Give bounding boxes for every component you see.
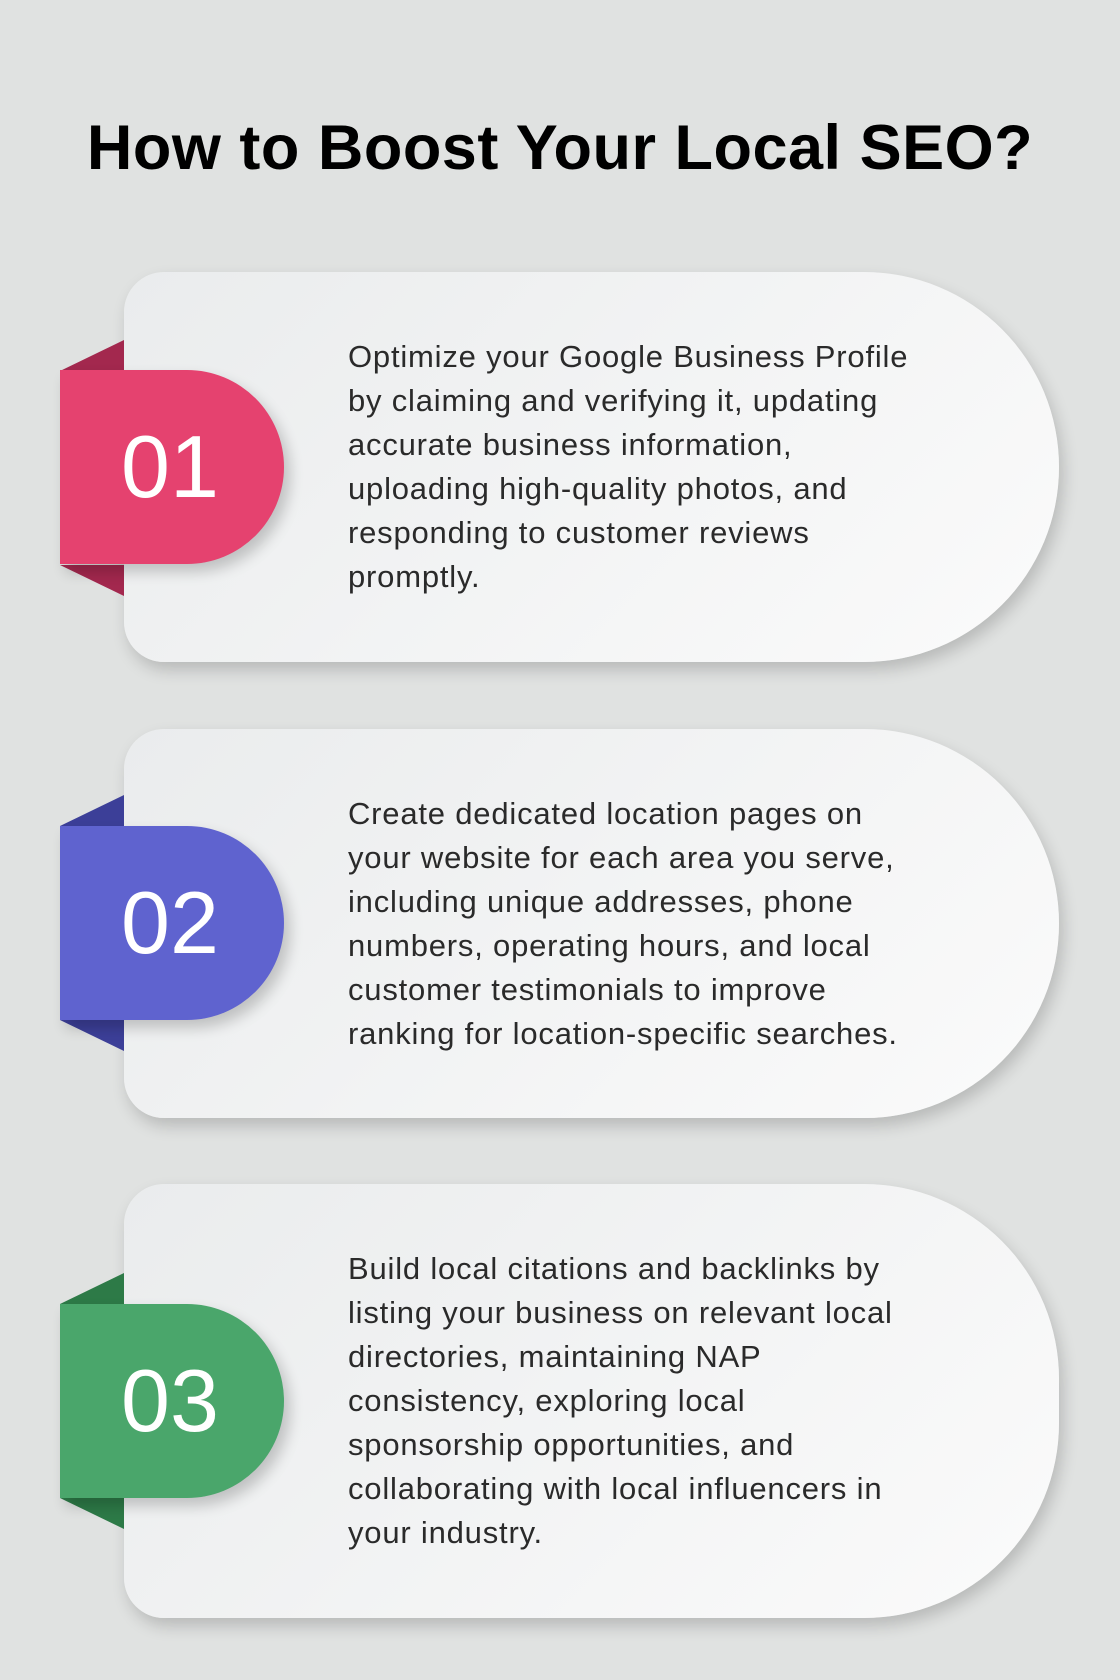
text: step 2: including unique addresses, phone: [348, 884, 854, 918]
number 01: 01: [121, 417, 219, 516]
text: step 1: responding to customer reviews: [348, 515, 810, 550]
text: step 2: numbers, operating hours, and local: [348, 928, 871, 962]
fold top: [60, 1273, 124, 1304]
text: step 3: sponsorship opportunities, and: [348, 1427, 794, 1462]
text: step 1: promptly.: [348, 559, 480, 594]
fold bottom: [60, 1020, 124, 1051]
text: step 3: Build local citations and backlinks by: [348, 1251, 880, 1286]
panel: step 1 card: [124, 272, 1059, 662]
text: step 2: your website for each area you serve,: [348, 840, 895, 874]
badge: step 03: [60, 1273, 296, 1529]
text: step 1: [348, 339, 908, 594]
number 03: 03: [121, 1351, 219, 1450]
text: step 2: ranking for location-specific searches.: [348, 1016, 898, 1050]
text: step 2: customer testimonials to improve: [348, 972, 827, 1006]
panel: step 2 card: [124, 729, 1059, 1118]
text: step 3: consistency, exploring local: [348, 1383, 745, 1418]
text: step 3: [348, 1251, 893, 1550]
text: step 3: listing your business on relevant local: [348, 1295, 893, 1330]
text: step 2: Create dedicated location pages on: [348, 796, 863, 830]
text: step 3: your industry.: [348, 1515, 543, 1550]
title: How to Boost Your Local SEO?: [87, 113, 1033, 183]
panel: step 3 card: [124, 1184, 1059, 1618]
text: step 1: Optimize your Google Business Profile: [348, 339, 908, 374]
text: step 3: directories, maintaining NAP: [348, 1339, 762, 1374]
fold top: [60, 795, 124, 826]
number 02: [60, 826, 284, 1020]
text: step 1: accurate business information,: [348, 427, 792, 462]
text: step 1: uploading high-quality photos, and: [348, 471, 847, 506]
number 03: [60, 1304, 284, 1498]
badge: step 02: [60, 795, 296, 1051]
number 02: 02: [121, 873, 219, 972]
text: step 3: collaborating with local influencers in: [348, 1471, 882, 1506]
fold bottom: [60, 1498, 124, 1529]
fold bottom: [60, 565, 124, 596]
badge: step 01: [60, 340, 296, 596]
text: step 2: [348, 796, 898, 1050]
text: step 1: by claiming and verifying it, updating: [348, 383, 878, 418]
number 01: [60, 370, 284, 564]
fold top: [62, 340, 124, 370]
